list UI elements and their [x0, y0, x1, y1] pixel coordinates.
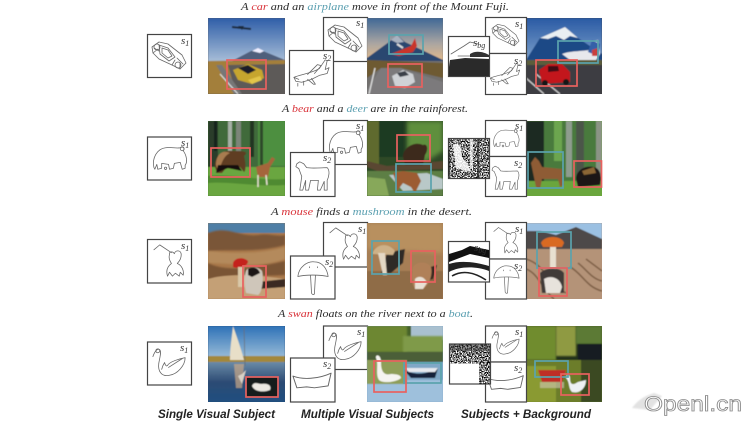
caption: swan and boat: A swan floats on the river next to a boat. [277, 308, 473, 320]
image: mouse and mushroom in desert dunes [208, 223, 285, 299]
sketch: s bg mountain: s [473, 37, 477, 49]
caption: mouse and mushroom: A mouse finds a mushroom in the desert. [270, 206, 472, 218]
highlight box: car [227, 60, 266, 89]
image: deer and bear among trunks [527, 121, 602, 196]
caption: bear and deer: A bear and a deer are in the rainforest. [281, 103, 468, 115]
sketch: s2 mushroom: s [325, 256, 329, 268]
highlight box: swan [246, 377, 278, 397]
sketch: s2 mushroom: s [514, 260, 518, 272]
highlight box: bear [211, 148, 250, 177]
sketch: s2 mushroom: 2 [518, 264, 522, 273]
sketch: s1 bear [324, 120, 368, 164]
highlight box: car [536, 60, 577, 86]
sketch: single subject bear: s [181, 137, 185, 149]
sketch: s1 swan: 1 [519, 330, 523, 339]
sketch: s2 deer [290, 152, 335, 196]
image: car under Mount Fuji with plane [208, 18, 285, 94]
sketch: s2 plane: s [514, 55, 518, 67]
sketch: s1 mouse [324, 222, 368, 267]
image: swan and rowing boat on green river [367, 326, 443, 402]
sketch: s2 deer: s [514, 157, 518, 169]
highlight box: mouse [539, 268, 567, 296]
sketch: s bg willows [450, 344, 490, 384]
highlight box: mouse [411, 251, 435, 282]
sketch: single subject swan [148, 342, 192, 385]
sketch: single subject car: 1 [185, 39, 189, 48]
sketch: s1 car: 1 [519, 22, 523, 31]
sketch: single subject bear: 1 [185, 141, 189, 150]
watermark: Openl.cn: Openl.cn [644, 393, 742, 416]
sketch: single subject swan: 1 [184, 346, 188, 355]
sketch: s bg mountain: bg [477, 41, 485, 50]
image: mushroom and mouse on rippled sand [527, 223, 602, 299]
sketch: single subject swan: s [180, 342, 184, 354]
highlight box: bear [574, 161, 602, 187]
sketch: s2 boat: s [514, 362, 518, 374]
sketch: s2 boat: 2 [327, 362, 331, 371]
image: swan and sailboat on lake [208, 326, 285, 402]
sketch: single subject car [148, 34, 192, 78]
sketch: s1 swan: s [357, 326, 361, 338]
image: bear and deer in forest [208, 121, 285, 196]
highlight box: plane [389, 35, 423, 54]
sketch: s2 boat: s [323, 358, 327, 370]
sketch: s1 car: s [515, 18, 519, 30]
sketch: single subject car: s [181, 35, 185, 47]
sketch: single subject mouse [148, 240, 192, 283]
column label: subjects + background: Subjects + Background [461, 409, 592, 421]
highlight box: deer [528, 152, 563, 188]
sketch: s1 mouse: 1 [519, 227, 523, 236]
image: red car and white plane before mountain [527, 18, 602, 94]
sketch: s2 deer: 2 [518, 161, 522, 170]
sketch: s2 plane [290, 50, 334, 94]
sketch: s1 mouse: s [358, 223, 362, 235]
highlight box: mushroom [537, 232, 571, 268]
sketch: s2 deer [486, 156, 526, 196]
highlight box: car [388, 64, 422, 87]
sketch: s2 boat: 2 [518, 366, 522, 375]
column label: multiple visual subjects: Multiple Visual Subjects [301, 409, 434, 421]
sketch: s1 bear: s [515, 120, 519, 132]
sketch: s2 mushroom [290, 256, 335, 299]
sketch: s bg mountain [448, 36, 490, 76]
sketch: s1 car [486, 18, 526, 54]
sketch: s2 mushroom: 2 [329, 260, 333, 269]
highlight box: boat [535, 361, 568, 377]
sketch: s1 swan: 1 [361, 330, 365, 339]
sketch: s1 mouse [486, 222, 526, 259]
highlight box: plane [558, 41, 598, 63]
sketch: s1 mouse: 1 [362, 227, 366, 236]
sketch: s2 boat [290, 358, 335, 402]
sketch: s bg forest [448, 138, 490, 178]
sketch: s1 car [324, 17, 368, 62]
image: bear and deer by stream [367, 121, 443, 196]
sketch: s1 car: s [356, 17, 360, 29]
highlight box: swan [374, 361, 406, 392]
sketch: s bg desert: s [474, 242, 478, 254]
sketch: s1 bear: s [356, 120, 360, 132]
sketch: single subject mouse: 1 [185, 244, 189, 253]
highlight box: swan [561, 374, 589, 395]
image: plane and car before mountain [367, 18, 443, 94]
sketch: s1 bear: 1 [519, 124, 523, 133]
highlight box: boat [404, 363, 441, 383]
sketch: s2 deer: s [323, 152, 327, 164]
highlight box: deer [396, 164, 431, 192]
sketch: s1 swan: s [515, 326, 519, 338]
caption: car and airplane: A car and an airplane move in front of the Mount Fuji. [240, 1, 509, 13]
sketch: single subject bear [148, 137, 192, 180]
column label: single visual subject: Single Visual Subject [158, 409, 276, 421]
sketch: s bg desert [448, 242, 490, 282]
sketch: s2 plane: s [323, 50, 327, 62]
sketch: s1 car: 1 [360, 21, 364, 30]
sketch: s1 bear [486, 120, 526, 156]
sketch: s1 swan [486, 326, 526, 362]
sketch: s1 swan [324, 326, 368, 370]
sketch: s1 mouse: s [515, 223, 519, 235]
sketch: s2 plane [486, 54, 526, 94]
sketch: s1 bear: 1 [360, 124, 364, 133]
highlight box: mushroom [372, 241, 399, 274]
sketch: s bg desert: bg [478, 246, 486, 255]
highlight box: bear [397, 135, 430, 161]
sketch: s2 plane: 2 [518, 59, 522, 68]
sketch: s2 boat [486, 362, 526, 402]
image: red boat and swan among willows [527, 326, 602, 402]
sketch: s2 plane: 2 [327, 54, 331, 63]
highlight box: mouse [243, 266, 266, 297]
sketch: s2 mushroom [486, 259, 526, 299]
sketch: single subject mouse: s [181, 240, 185, 252]
image: mushroom and mouse on brown ground [367, 223, 443, 299]
sketch: s2 deer: 2 [327, 156, 331, 165]
